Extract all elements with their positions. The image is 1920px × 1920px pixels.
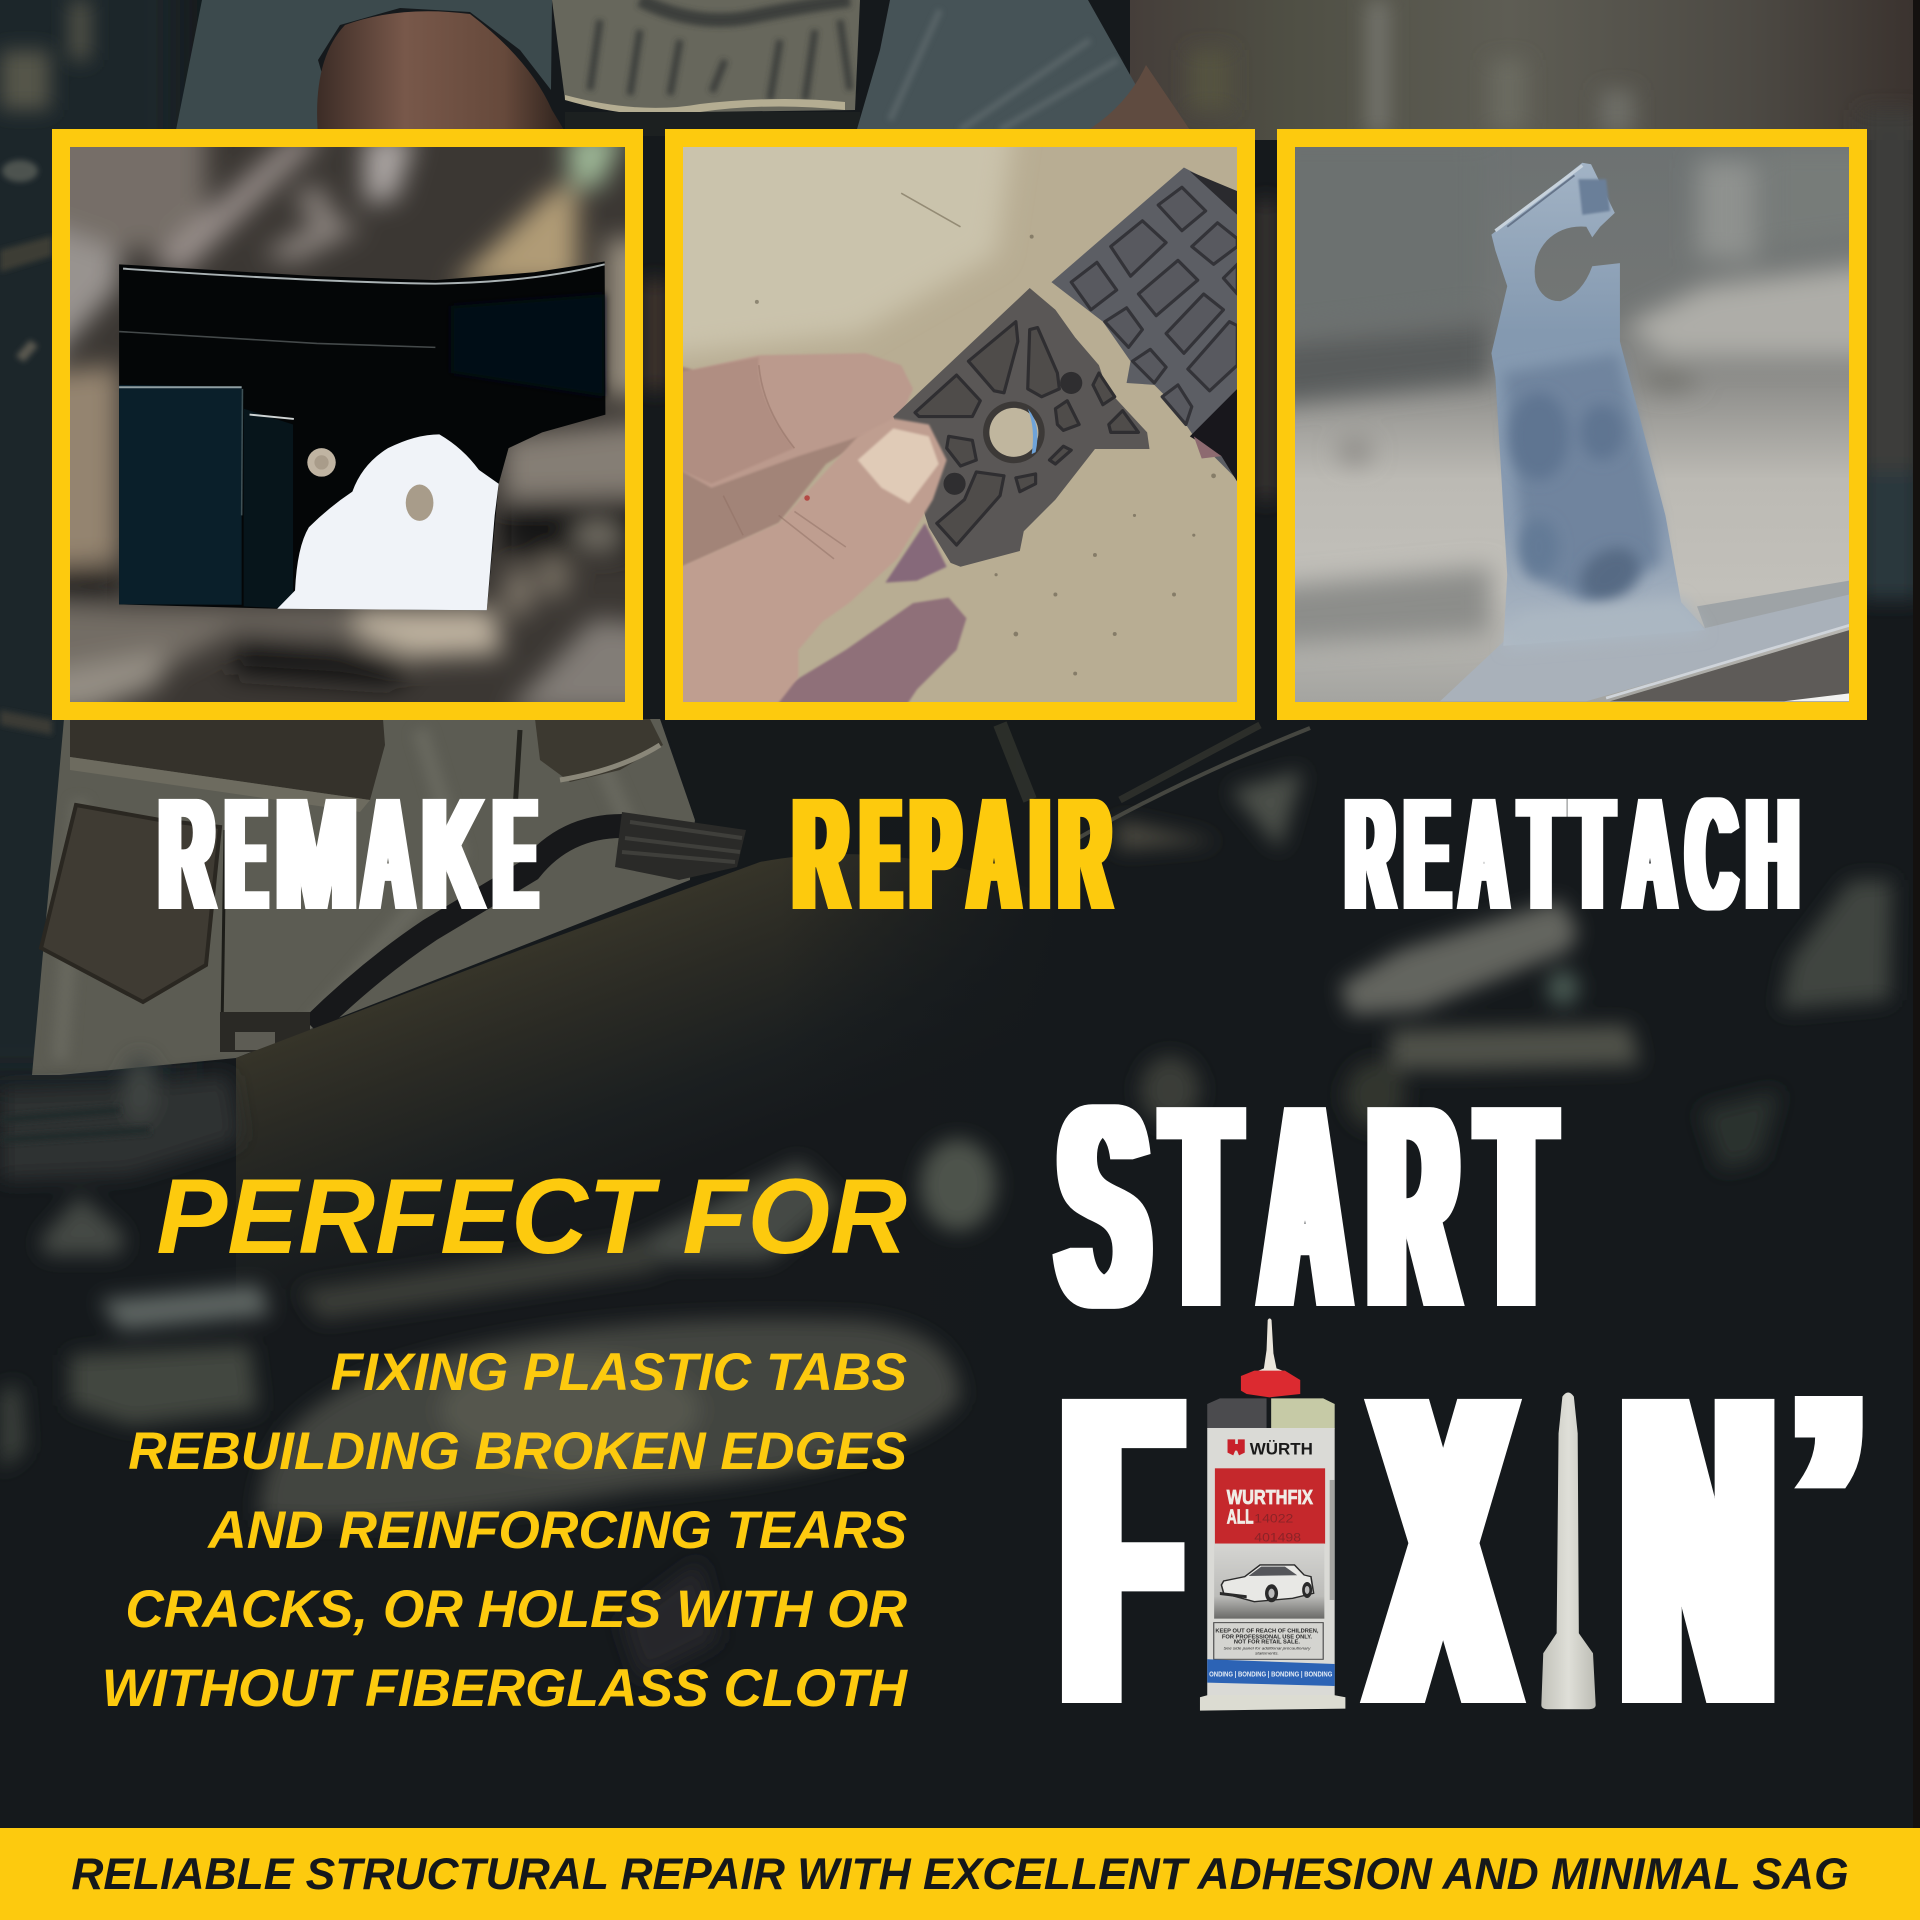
background: trouser pockets bbox=[41, 719, 663, 1030]
panel: repair bbox=[660, 120, 1246, 713]
list: uses: REBUILDING BROKEN EDGES bbox=[128, 1422, 907, 1481]
list: uses: AND REINFORCING TEARS bbox=[206, 1501, 907, 1560]
heading: remake: R bbox=[160, 764, 214, 943]
background: workshop handle and cable bbox=[220, 812, 746, 1052]
heading: reattach: R bbox=[1346, 764, 1394, 943]
background: bare arm bbox=[317, 11, 567, 135]
plastic tab with hook bbox=[1492, 162, 1681, 642]
red label bbox=[1215, 1468, 1325, 1544]
background: cables top centre bbox=[1000, 724, 1310, 840]
background: blurred engine parts lower left bbox=[0, 1056, 996, 1680]
heading: repair: A bbox=[969, 764, 1019, 943]
car illustration panel bbox=[1214, 1544, 1324, 1619]
heading: remake bbox=[160, 764, 536, 943]
poster canvas: R bbox=[1059, 764, 1110, 943]
list: uses: CRACKS, OR HOLES WITH OR bbox=[125, 1580, 908, 1639]
background: dark right edge bbox=[1913, 0, 1920, 1828]
heading: remake: M bbox=[276, 764, 357, 943]
poster canvas: H bbox=[1747, 764, 1798, 943]
warning box bbox=[1214, 1623, 1323, 1659]
heading: repair bbox=[794, 764, 1110, 943]
frame: reattach yellow border bbox=[1286, 138, 1858, 711]
background: dark gap behind cables bbox=[663, 719, 1100, 900]
broken plastic piece right bbox=[1051, 167, 1237, 480]
background: engine cover fade bbox=[780, 820, 1062, 1360]
blue band bbox=[1207, 1659, 1335, 1686]
heading: reattach: E bbox=[1405, 764, 1449, 943]
heading: reattach: A bbox=[1625, 764, 1675, 943]
panel: reattach bbox=[1270, 136, 1887, 711]
heading: perfect for: PERFECT FOR bbox=[156, 1157, 907, 1276]
photo: misty backdrop and tab bbox=[1295, 147, 1849, 702]
cartridge base bbox=[1200, 1695, 1345, 1711]
heading: reattach: C bbox=[1687, 764, 1736, 943]
product: wurthfix cartridge: WÜRTH bbox=[1250, 1440, 1313, 1458]
palm and fingers bbox=[676, 353, 966, 713]
heading: remake: K bbox=[423, 764, 482, 943]
background: shirt front bbox=[552, 0, 860, 112]
product: wurthfix cartridge: See side panel for additional precautionary bbox=[1223, 1646, 1311, 1650]
headline: fixin: F bbox=[1067, 1303, 1176, 1797]
broken plastic piece left bbox=[893, 288, 1150, 567]
list: uses: FIXING PLASTIC TABS bbox=[331, 1343, 907, 1402]
banner text: RELIABLE STRUCTURAL REPAIR WITH EXCELLENT ADHESION AND MINIMAL SAG bbox=[71, 1850, 1849, 1899]
product: wurthfix cartridge: NOT FOR RETAIL SALE. bbox=[1234, 1640, 1300, 1645]
list: uses bbox=[102, 1343, 909, 1718]
photo: black fender bracket bbox=[119, 262, 605, 610]
finger creases bbox=[723, 365, 846, 559]
background: cable lower left bbox=[0, 1110, 150, 1140]
heading: reattach: A bbox=[1461, 764, 1507, 943]
product: wurthfix cartridge: WURTHFIX bbox=[1227, 1486, 1313, 1509]
product: wurthfix cartridge: FOR PROFESSIONAL USE ONLY. bbox=[1222, 1635, 1313, 1640]
background: forearm right bbox=[1078, 65, 1194, 136]
photo: blurred engine backdrop bbox=[70, 147, 625, 702]
resin reservoirs bbox=[1207, 1398, 1267, 1429]
heading: reattach bbox=[1346, 764, 1798, 943]
product: wurthfix cartridge: statements. bbox=[1255, 1651, 1279, 1656]
photo: concrete floor bbox=[683, 147, 1237, 702]
bottom banner bbox=[0, 1828, 1920, 1920]
heading: repair: P bbox=[911, 764, 959, 943]
product: wurthfix cartridge: KEEP OUT OF REACH OF CHILDREN, bbox=[1215, 1629, 1319, 1634]
tab mottling bbox=[1509, 393, 1650, 612]
wurth logo bbox=[1228, 1439, 1245, 1455]
heading: reattach: T bbox=[1521, 764, 1562, 943]
frame: remake yellow border bbox=[61, 138, 634, 711]
frame: repair yellow border bbox=[674, 138, 1246, 711]
background: shirt sleeve right bbox=[855, 0, 1148, 136]
poster canvas: T bbox=[1481, 1045, 1552, 1368]
product: wurthfix cartridge: 14022 bbox=[1254, 1511, 1293, 1525]
product: wurthfix cartridge: 401498 bbox=[1254, 1530, 1301, 1544]
product: wurthfix cartridge bbox=[1200, 1318, 1345, 1711]
panel: remake bbox=[40, 120, 657, 713]
headline: start: A bbox=[1263, 1045, 1347, 1368]
background: left margin highlights bbox=[0, 160, 52, 735]
heading: repair: I bbox=[1032, 764, 1048, 943]
thumb bbox=[676, 419, 947, 713]
background: shirt sleeve left bbox=[175, 0, 552, 135]
background: blurred engine parts right bbox=[1117, 770, 1892, 1170]
apostrophe: ’ bbox=[1783, 1326, 1874, 1691]
heading: repair: E bbox=[862, 764, 900, 943]
background: workshop wall top right bbox=[1130, 0, 1920, 140]
heading: remake: E bbox=[227, 764, 266, 943]
repaired white plastic bbox=[277, 434, 499, 610]
heading: reattach: T bbox=[1573, 764, 1612, 943]
photo: hand holding broken part bbox=[676, 167, 1237, 713]
product: wurthfix cartridge: ALL bbox=[1227, 1506, 1254, 1528]
heading: repair: R bbox=[794, 764, 848, 943]
headline: start: T bbox=[1166, 1045, 1236, 1368]
red cap bbox=[1241, 1371, 1300, 1397]
mixing tip bbox=[1256, 1318, 1285, 1372]
background: left dark area bbox=[0, 0, 180, 1080]
list: uses: WITHOUT FIBERGLASS CLOTH bbox=[102, 1659, 909, 1718]
headline: start bbox=[1060, 1045, 1552, 1368]
background: trousers bbox=[32, 719, 695, 1075]
heading: remake: A bbox=[363, 764, 413, 943]
product: wurthfix cartridge: ONDING | BONDING | BONDING | BONDING bbox=[1209, 1670, 1333, 1678]
headline: start: R bbox=[1370, 1045, 1456, 1368]
headline: start: S bbox=[1060, 1045, 1147, 1368]
background: engine cover bbox=[236, 854, 1060, 1350]
background: trouser folds bbox=[60, 730, 640, 1060]
poster canvas: E bbox=[494, 764, 536, 943]
headline: fixin bbox=[1067, 1303, 1874, 1797]
headline: fixin: X bbox=[1375, 1303, 1512, 1797]
cartridge body bbox=[1207, 1428, 1335, 1697]
product: mixing nozzle bbox=[1541, 1392, 1596, 1709]
